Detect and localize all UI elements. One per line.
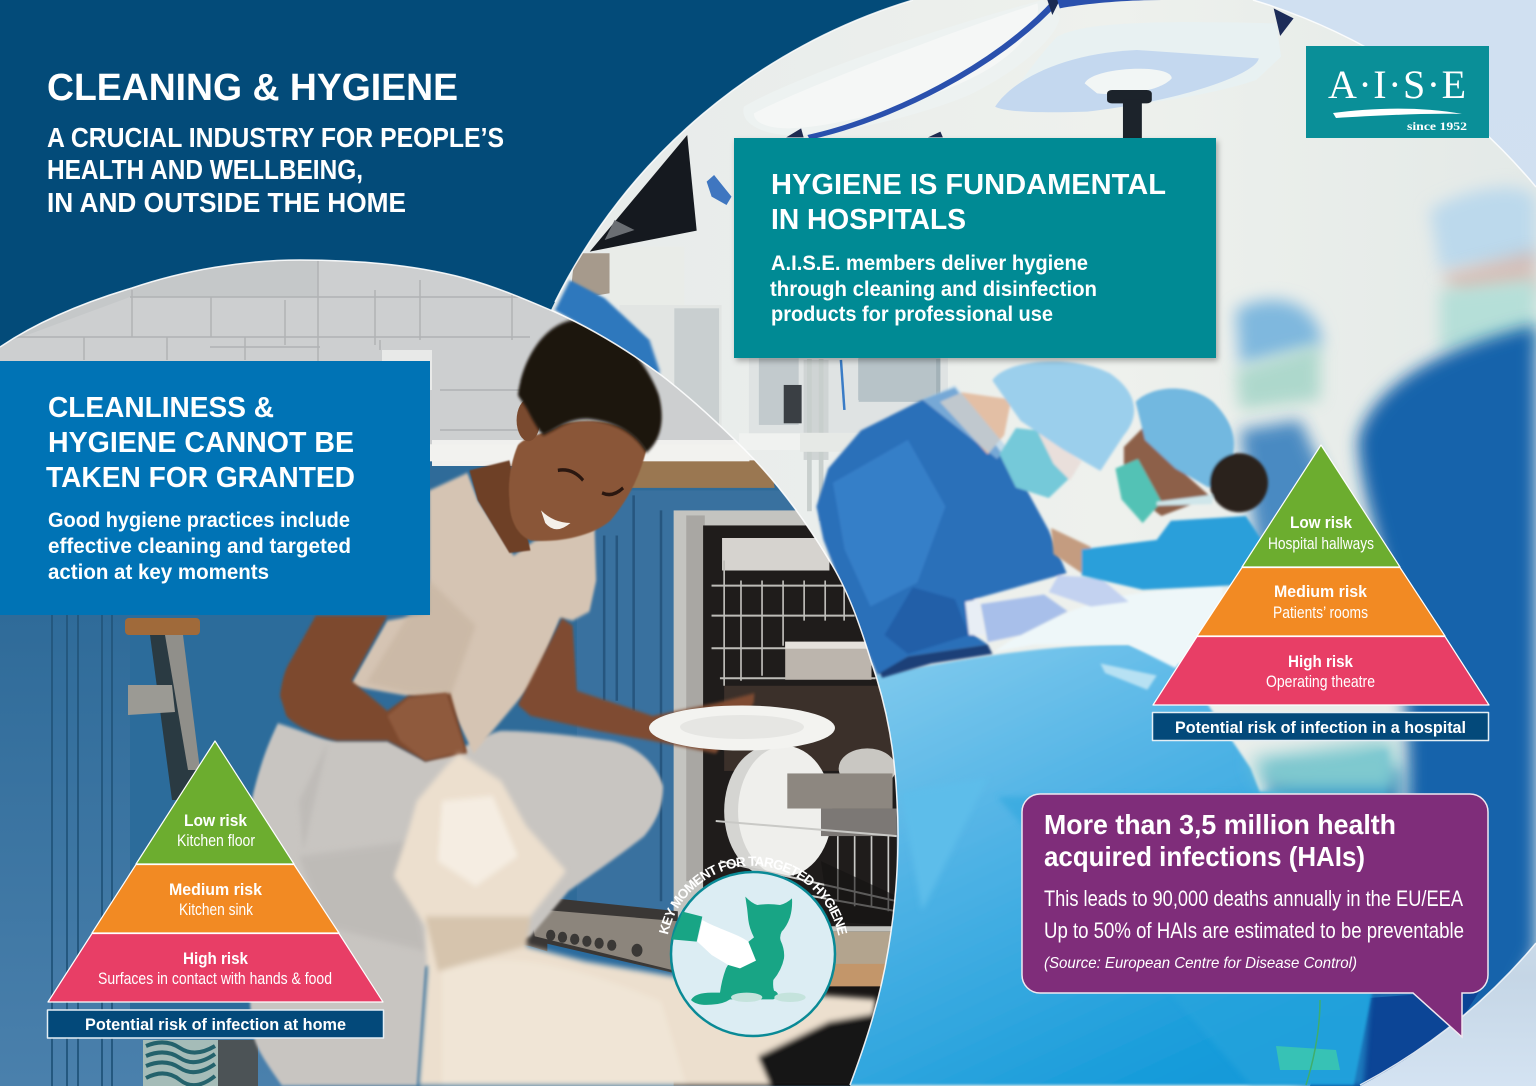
white sheet <box>995 585 1222 668</box>
hospital photo edge <box>555 0 1536 1085</box>
tier: medium risk: Patients’ rooms <box>1273 603 1368 622</box>
logo: A.I.S.E. <box>1306 46 1489 138</box>
body text: A.I.S.E. members deliver hygiene <box>771 252 1088 275</box>
chart caption: Potential risk of infection at home <box>85 1015 346 1034</box>
callout heading <box>1044 809 1396 872</box>
background: navy header area <box>0 0 1000 420</box>
dishwasher lower rack <box>787 773 893 809</box>
body text <box>770 252 1097 326</box>
tier: medium risk <box>92 864 339 933</box>
shirt <box>350 473 596 753</box>
panel: home cleanliness <box>0 361 430 615</box>
icon: key moment, hand petting a cat <box>659 856 848 1038</box>
pyramid chart: risk at home <box>48 741 384 1038</box>
hair <box>518 320 662 453</box>
chart caption <box>48 1010 384 1038</box>
subtitle: HEALTH AND WELLBEING, <box>47 154 363 185</box>
dishes <box>724 749 771 872</box>
tier: low risk <box>1242 445 1400 567</box>
heading: HYGIENE IS FUNDAMENTAL <box>771 169 1166 201</box>
body text: products for professional use <box>771 303 1053 326</box>
lamps and wall equipment <box>555 0 1294 460</box>
monitor tubes <box>800 359 936 521</box>
callout body <box>1044 886 1464 972</box>
home photo edge <box>0 260 898 1085</box>
tier: medium risk <box>1197 568 1445 636</box>
patient monitor cable and blue machine <box>1276 1000 1340 1085</box>
dog <box>394 753 876 1086</box>
panel: hospitals <box>734 138 1216 358</box>
tier: low risk: Kitchen floor <box>177 831 255 850</box>
title: CLEANING & HYGIENE <box>47 67 458 109</box>
tier: low risk <box>136 741 294 864</box>
tier: high risk: Surfaces in contact with hands & food <box>98 969 332 988</box>
blurred staff on the right <box>1236 188 1536 1086</box>
blue drape <box>842 645 1410 1085</box>
plate <box>649 706 835 750</box>
tier: high risk: High risk <box>1288 652 1353 671</box>
callout body: Up to 50% of HAIs are estimated to be preventable <box>1044 918 1464 943</box>
tiled wall <box>0 250 790 466</box>
trousers <box>247 723 663 1086</box>
tier: high risk <box>1153 636 1489 705</box>
dishwasher top rack <box>712 561 876 686</box>
surgeon with teal scrubs <box>1051 388 1268 590</box>
tier: high risk <box>48 934 383 1002</box>
callout: health acquired infections <box>1022 794 1488 1037</box>
kitchen and dishwasher <box>371 444 897 1086</box>
callout heading: More than 3,5 million health <box>1044 809 1396 840</box>
subtitle <box>47 122 504 218</box>
panel: title block <box>47 67 504 218</box>
stool <box>125 618 200 800</box>
logo: A.I.S.E.: since 1952 <box>1407 121 1467 133</box>
tier: low risk: Low risk <box>1290 513 1352 532</box>
door and control panel <box>833 931 891 964</box>
drapes and surgeons <box>800 359 1410 1085</box>
heading <box>771 169 1166 236</box>
woman <box>247 320 754 1086</box>
left cabinets <box>0 615 310 1086</box>
callout body: (Source: European Centre for Disease Control) <box>1044 955 1357 972</box>
heading: CLEANLINESS & <box>48 392 274 424</box>
chart caption <box>1152 712 1488 740</box>
subtitle: IN AND OUTSIDE THE HOME <box>47 187 406 218</box>
body text: action at key moments <box>48 561 269 584</box>
right arm <box>518 618 754 753</box>
heading: HYGIENE CANNOT BE <box>48 427 354 459</box>
patterned floor <box>143 1040 258 1086</box>
tier: high risk: High risk <box>183 949 248 968</box>
curved label: KEY MOMENT FOR TARGETED HYGIENE <box>659 856 848 936</box>
tier: high risk: Operating theatre <box>1266 672 1375 691</box>
tier: low risk: Hospital hallways <box>1268 534 1374 553</box>
tier: medium risk: Medium risk <box>169 880 263 899</box>
photo: woman at home with dog and dishwasher <box>0 250 910 1086</box>
tier: medium risk: Kitchen sink <box>179 900 253 919</box>
callout body: This leads to 90,000 deaths annually in the EU/EEA <box>1044 886 1463 911</box>
photo: hospital operating room <box>480 0 1536 1086</box>
chart caption: Potential risk of infection in a hospital <box>1175 718 1466 737</box>
surgeon with blue gown <box>816 361 1134 678</box>
body text: Good hygiene practices include <box>48 509 350 532</box>
heading: IN HOSPITALS <box>771 204 966 236</box>
tier: medium risk: Medium risk <box>1274 582 1368 601</box>
body text: effective cleaning and targeted <box>48 535 351 558</box>
neck <box>469 460 530 553</box>
face <box>509 421 646 541</box>
body text <box>48 509 351 584</box>
heading <box>46 392 355 494</box>
callout heading: acquired infections (HAIs) <box>1044 841 1365 872</box>
body text: through cleaning and disinfection <box>770 278 1097 301</box>
left arm <box>280 616 467 761</box>
logo: A.I.S.E.: A·I·S·E <box>1328 62 1466 107</box>
pyramid chart: risk in a hospital <box>1152 445 1489 740</box>
heading: TAKEN FOR GRANTED <box>46 462 355 494</box>
cat and hand <box>672 897 806 1005</box>
tier: low risk: Low risk <box>184 811 247 830</box>
subtitle: A CRUCIAL INDUSTRY FOR PEOPLE’S <box>47 122 504 153</box>
